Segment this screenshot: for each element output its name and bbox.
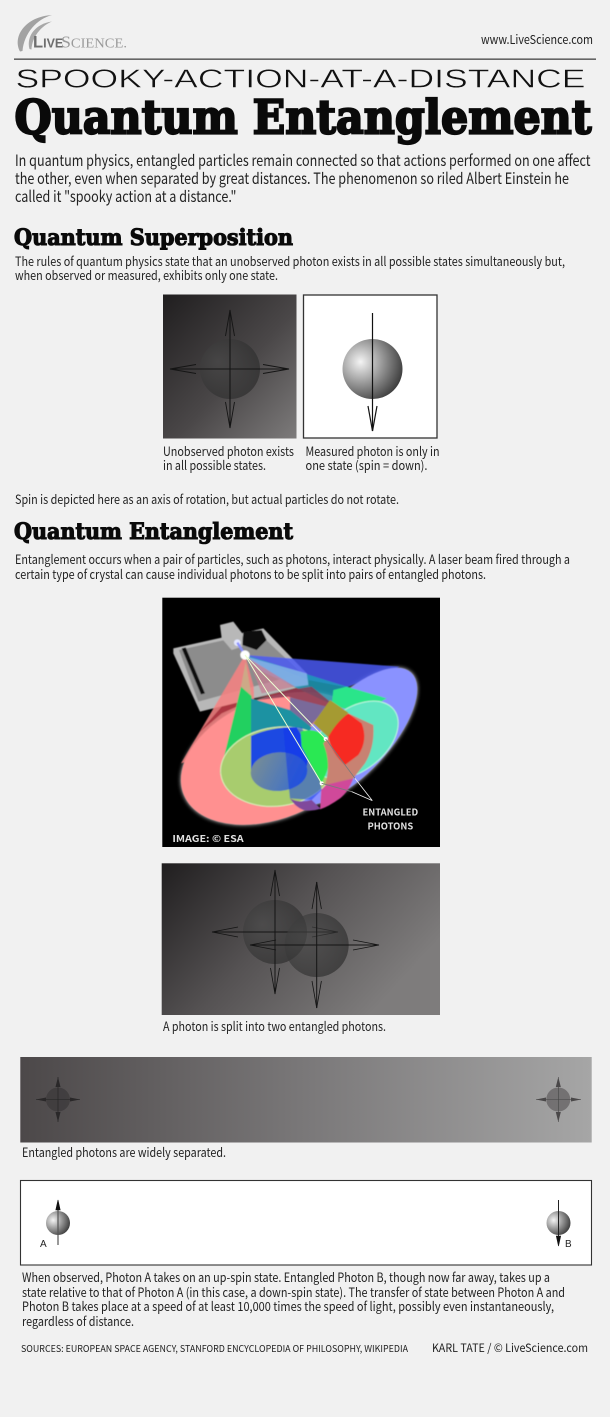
blue left cone — [249, 727, 322, 811]
icon: first entangled photon — [212, 870, 338, 994]
logo: LiveScience — [18, 15, 127, 52]
credit: KARL TATE / © LiveScience.com — [432, 1340, 588, 1356]
caption: separated: Entangled photons are widely separated. — [22, 1142, 226, 1161]
heading: quantum entanglement: Quantum Entanglement — [14, 519, 294, 545]
caption: measured: Measured photon is only in — [306, 441, 440, 460]
spin note: Spin is depicted here as an axis of rotation, but actual particles do not rotate. — [15, 489, 399, 508]
entanglement description: certain type of crystal can cause individual photons to be split into pairs of entangled photons. — [15, 564, 486, 583]
image credit: IMAGE: © ESA — [172, 831, 244, 845]
platform and laser — [173, 622, 308, 712]
icon: unobserved sphere with four arrows — [170, 310, 289, 428]
caption: unobserved: Unobserved photon exists — [163, 441, 294, 460]
label B: B — [565, 1239, 572, 1250]
label A: A — [40, 1239, 47, 1250]
label: entangled photons — [363, 805, 418, 832]
icon: photon B spin down — [546, 1200, 570, 1246]
sources: SOURCES: EUROPEAN SPACE AGENCY, STANFORD ENCYCLOPEDIA OF PHILOSOPHY, WIKIPEDIA — [21, 1341, 408, 1355]
superposition description — [15, 251, 565, 284]
panel: observed photons — [20, 1180, 592, 1265]
superposition description: when observed or measured, exhibits only one state. — [15, 265, 278, 284]
logo: LiveScience: LIVE — [33, 34, 63, 52]
panel: measured photon — [304, 295, 437, 438]
panel: unobserved photon — [163, 294, 296, 438]
green right cone — [297, 685, 413, 795]
explanation paragraph: regardless of distance. — [22, 1311, 134, 1330]
label: entangled photons: PHOTONS — [367, 818, 413, 832]
caption: measured: one state (spin = down). — [306, 455, 428, 474]
coloured beams — [161, 622, 439, 850]
green left cone — [215, 662, 340, 814]
intro paragraph: called it "spooky action at a distance." — [15, 185, 236, 207]
photon beams — [245, 655, 326, 783]
explanation paragraph — [22, 1267, 565, 1330]
label: entangled photons: ENTANGLED — [363, 805, 418, 819]
panel: photon split — [162, 863, 440, 1015]
icon: right photon — [536, 1077, 581, 1122]
icon: photon A spin up — [46, 1200, 70, 1245]
website url: www.LiveScience.com — [481, 30, 593, 48]
icon: second entangled photon — [250, 882, 379, 1008]
glows — [161, 647, 439, 850]
panel: laser crystal diagram — [161, 598, 440, 850]
caption: split: A photon is split into two entangled photons. — [163, 1016, 386, 1035]
logo: LiveScience: SCIENCE. — [61, 32, 127, 52]
heading: quantum superposition: Quantum Superposition — [14, 225, 293, 251]
panel: separated photons — [20, 1057, 592, 1142]
kicker title: SPOOKY-ACTION-AT-A-DISTANCE — [16, 65, 586, 93]
caption: measured — [306, 441, 440, 474]
intro paragraph — [15, 149, 591, 207]
caption: unobserved — [163, 441, 294, 474]
pointer lines — [322, 739, 355, 792]
entanglement description — [15, 549, 570, 583]
icon: left photon — [36, 1077, 80, 1122]
blue outer cone — [245, 647, 439, 826]
red outer cone — [161, 655, 385, 850]
caption: unobserved: in all possible states. — [163, 455, 266, 474]
diagram: entangled photon cones — [161, 622, 439, 850]
overlap wedges — [301, 700, 374, 785]
teal and maroon wedges — [245, 655, 347, 727]
icon: measured sphere spin down — [342, 313, 402, 431]
header rule — [14, 58, 596, 60]
